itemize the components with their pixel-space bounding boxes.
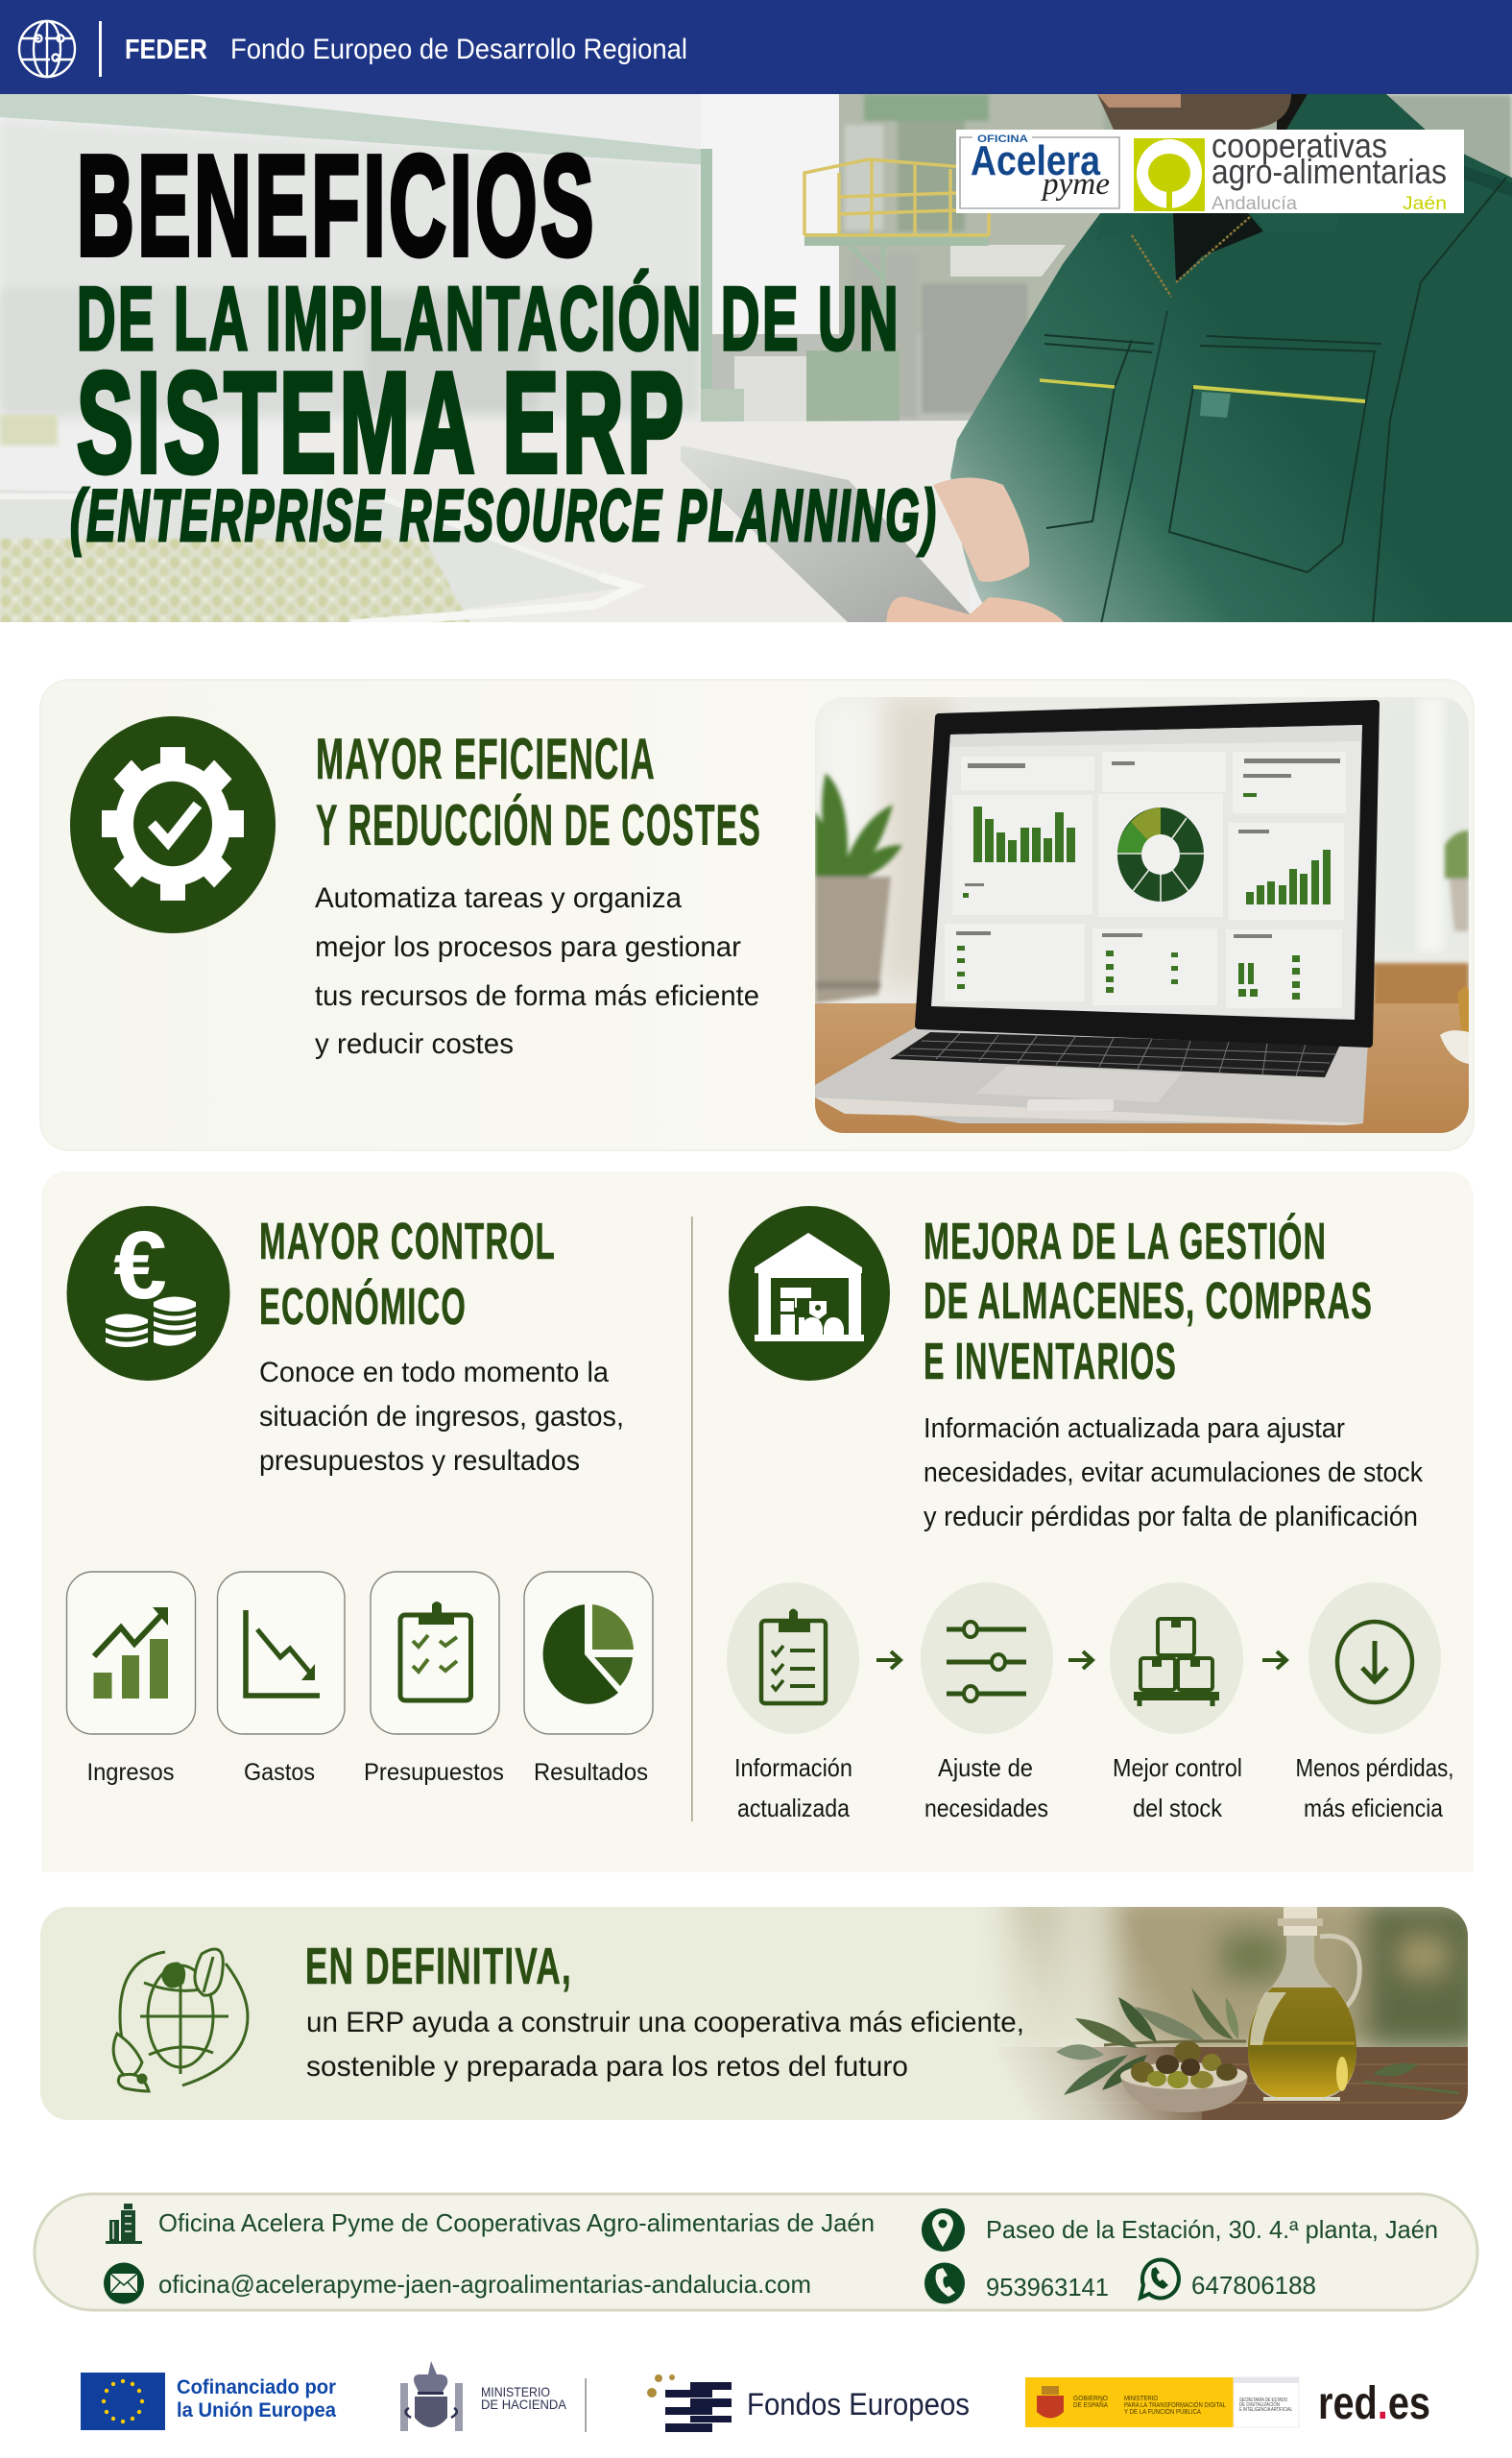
hero banner [0, 94, 1512, 624]
laptop base [815, 1025, 1368, 1123]
step: ajuste de necesidades: necesidades [924, 1794, 1048, 1822]
step: mejor control del stock [1110, 1582, 1243, 1822]
tile: resultados [524, 1572, 653, 1786]
step: menos pérdidas [1296, 1582, 1453, 1822]
icon: phone [924, 2262, 965, 2304]
header bar [0, 0, 1512, 94]
logo: Ministerio de Hacienda: MINISTERIO [481, 2384, 550, 2399]
logo: cooperativas agro-alimentarias: cooperativas [1212, 126, 1387, 165]
logo: Fondos Europeos [647, 2374, 970, 2432]
panel: en definitiva banner [40, 1892, 1488, 2120]
tile: gastos: Gastos [244, 1759, 315, 1786]
screen bezel [919, 704, 1376, 1044]
logo: Gobierno de España: DE DIGITALIZACIÓN [1239, 2401, 1280, 2408]
logo: cooperativas agro-alimentarias: Jaén [1403, 194, 1447, 214]
logo: Gobierno de España: SECRETARÍA DE ESTADO [1239, 2397, 1287, 2403]
crest [400, 2361, 463, 2431]
step: información actualizada: Información [734, 1753, 852, 1782]
pockets [1044, 178, 1506, 624]
partner logos [956, 126, 1464, 214]
factory background [0, 94, 1512, 447]
tile: presupuestos: Presupuestos [364, 1759, 504, 1786]
logo: cofinanciado por la Unión Europea: Cofinanciado por [177, 2376, 336, 2398]
icon: leaf globe [113, 1949, 248, 2091]
logo: cofinanciado por la Unión Europea: la Unión Europea [177, 2399, 336, 2422]
dashboard text marks [956, 759, 1340, 938]
body text: mejor los procesos para gestionar [315, 931, 741, 963]
email: oficina@acelerapyme-jaen-agroalimentarias-andalucia.com [158, 2270, 811, 2299]
logo: Ministerio de Hacienda: DE HACIENDA [481, 2397, 567, 2412]
body text: un ERP ayuda a construir una cooperativa más eficiente, [306, 2007, 1024, 2038]
body text [259, 1357, 624, 1477]
bottle of olive oil [1248, 1907, 1359, 2101]
worker with jacket [950, 94, 1512, 624]
heading: MAYOR CONTROL [259, 1213, 556, 1270]
tile: ingresos [67, 1572, 196, 1786]
heading [316, 727, 761, 857]
icon: location pin [922, 2208, 965, 2252]
logo: Oficina Acelera Pyme: pyme [1041, 167, 1110, 202]
phone number: 953963141 [986, 2273, 1109, 2301]
logo: Gobierno de España: Y DE LA FUNCIÓN PÚBLICA [1124, 2407, 1201, 2416]
logo: red.es: red.es [1318, 2378, 1430, 2429]
title line 1: BENEFICIOS [77, 127, 597, 285]
section: mejora de almacenes [727, 1206, 1453, 1822]
icon: euro and coins [67, 1206, 230, 1381]
logo: Oficina Acelera Pyme [960, 133, 1119, 208]
body text: Información actualizada para ajustar [924, 1413, 1345, 1444]
yellow railing [804, 159, 989, 235]
arrow [1068, 1651, 1092, 1669]
bar chart left [973, 807, 1075, 862]
title line 3: SISTEMA ERP [77, 344, 687, 502]
body text: situación de ingresos, gastos, [259, 1401, 624, 1433]
body text: necesidades, evitar acumulaciones de stock [924, 1458, 1423, 1488]
collar [1094, 213, 1339, 242]
tile: ingresos: Ingresos [86, 1759, 175, 1786]
olive crate [0, 490, 634, 624]
office name: Oficina Acelera Pyme de Cooperativas Agro-alimentarias de Jaén [158, 2208, 875, 2237]
FEDER label: FEDER [125, 35, 207, 65]
crest [1037, 2396, 1064, 2418]
logo: Gobierno de España: E INTELIGENCIA ARTIFICIAL [1239, 2407, 1292, 2413]
heading: MAYOR EFICIENCIA [316, 727, 656, 791]
tile: resultados: Resultados [534, 1759, 648, 1786]
body text: Automatiza tareas y organiza [315, 882, 682, 914]
heading: EN DEFINITIVA, [305, 1938, 572, 1995]
icon: whatsapp [1140, 2259, 1179, 2298]
body text: tus recursos de forma más eficiente [315, 980, 759, 1012]
logo: Gobierno de España: PARA LA TRANSFORMACIÓN DIGITAL [1124, 2400, 1226, 2409]
logo: cofinanciado por la Unión Europea [81, 2373, 336, 2430]
donut chart [1117, 807, 1204, 902]
step: ajuste de necesidades [921, 1582, 1053, 1822]
logo: Gobierno de España: MINISTERIO [1124, 2396, 1158, 2402]
contact bar [35, 2194, 1477, 2310]
icon: gear with check [70, 716, 276, 933]
logo: Fondos Europeos: Fondos Europeos [747, 2387, 970, 2422]
tablet [681, 446, 979, 624]
neck and beard [1097, 94, 1308, 130]
title line 4: (ENTERPRISE RESOURCE PLANNING) [70, 475, 938, 557]
arrow [876, 1651, 900, 1669]
heading: ECONÓMICO [259, 1278, 467, 1336]
title line 2: DE LA IMPLANTACIÓN DE UN [77, 268, 900, 369]
tile: gastos [217, 1572, 345, 1786]
section: mayor control económico [67, 1206, 653, 1786]
logo: Gobierno de España: DE ESPAÑA [1073, 2400, 1108, 2409]
keyboard [890, 1032, 1340, 1077]
whatsapp number: 647806188 [1191, 2271, 1316, 2300]
step: ajuste de necesidades: Ajuste de [938, 1753, 1033, 1782]
step: mejor control del stock: del stock [1133, 1794, 1223, 1822]
heading [259, 1213, 556, 1336]
body text [315, 882, 759, 1060]
logo: cooperativas agro-alimentarias [1134, 126, 1447, 214]
step: información actualizada: actualizada [737, 1794, 850, 1822]
step: mejor control del stock: Mejor control [1113, 1753, 1242, 1782]
body text: Conoce en todo momento la [259, 1357, 609, 1388]
body text [306, 2007, 1024, 2083]
icon: mail [104, 2262, 144, 2304]
step: información actualizada [727, 1582, 859, 1822]
heading: E INVENTARIOS [924, 1333, 1177, 1390]
fund name: Fondo Europeo de Desarrollo Regional [230, 34, 687, 65]
address: Paseo de la Estación, 30. 4.ª planta, Jaén [986, 2215, 1438, 2244]
photo: olive oil and olives [40, 1892, 1488, 2120]
panel: control and warehouse [41, 1171, 1474, 1872]
icon: building [106, 2204, 142, 2244]
dashboard panels [945, 752, 1346, 1008]
body text: y reducir pérdidas por falta de planificación [924, 1502, 1418, 1532]
body text: sostenible y preparada para los retos del futuro [306, 2051, 908, 2083]
photo: laptop dashboard [815, 697, 1469, 1133]
icon: euro and coins: € [113, 1212, 167, 1319]
icon: warehouse [729, 1206, 890, 1381]
arrow [1262, 1651, 1286, 1669]
bowl with olives [1120, 2041, 1248, 2112]
logo: Ministerio de Hacienda [400, 2361, 587, 2432]
logo: cooperativas agro-alimentarias: agro-alimentarias [1212, 152, 1447, 191]
logo: cooperativas agro-alimentarias: Andalucía [1212, 194, 1297, 214]
body text [924, 1413, 1423, 1532]
hero title [70, 127, 938, 557]
step: menos pérdidas: más eficiencia [1304, 1794, 1443, 1822]
heading: Y REDUCCIÓN DE COSTES [316, 793, 761, 857]
logo: Oficina Acelera Pyme: OFICINA [977, 133, 1028, 145]
bar chart right [1246, 850, 1331, 904]
panel: mayor eficiencia [40, 680, 1474, 1150]
body text: presupuestos y resultados [259, 1445, 580, 1477]
olive branch [1056, 1988, 1459, 2095]
logo: Gobierno de España [1025, 2377, 1299, 2427]
logo: Oficina Acelera Pyme: Acelera [971, 137, 1100, 184]
tile: presupuestos [364, 1572, 504, 1786]
hands [886, 478, 1066, 624]
step: menos pérdidas: Menos pérdidas, [1296, 1753, 1453, 1782]
body text: y reducir costes [315, 1028, 514, 1060]
heading [924, 1213, 1373, 1390]
logo: Gobierno de España: GOBIERNO [1073, 2396, 1109, 2402]
icon: globe network [19, 21, 75, 77]
